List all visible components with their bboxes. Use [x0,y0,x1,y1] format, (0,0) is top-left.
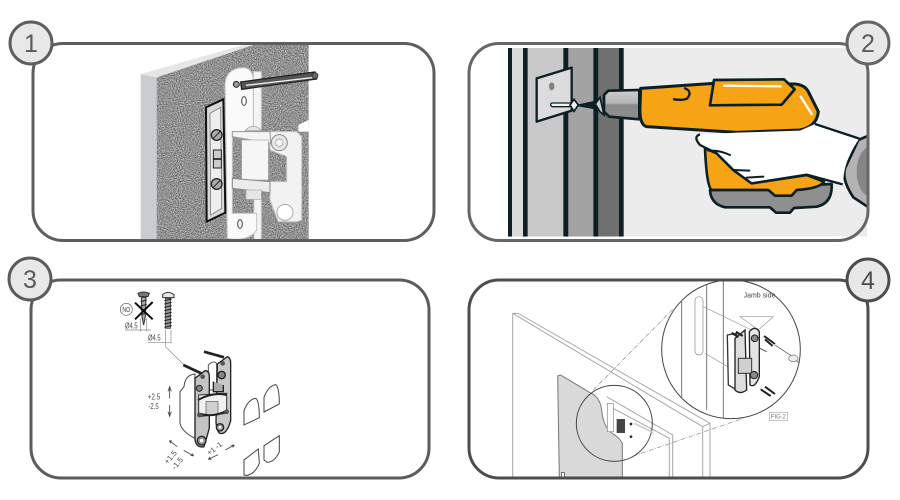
adjustment arrows and values: -2.5 [148,402,159,411]
concealed hinge [180,352,231,447]
rejected countersunk screw [120,292,153,332]
illustration: door and magnified hinge [513,280,803,478]
approved screw: Ø4.5 [148,333,161,343]
hinge leaves and body [225,68,309,240]
dash-dot guide lines [593,309,743,456]
hinge detail [727,328,775,396]
drill body [640,79,818,132]
adjustment arrows and values: +2.5 [148,393,161,402]
panel 3 border [31,280,429,478]
step badge 1: 1 [24,30,38,58]
door latch mark [561,473,564,478]
rejected countersunk screw: Ø4.5 [125,321,138,331]
step badge 3: 3 [23,266,37,294]
large detail circle [662,280,803,420]
cover caps [244,385,279,475]
gloved hand [696,124,859,184]
panel 4: door with detail circles [469,259,889,478]
drill bit [570,97,604,115]
FIG.2 tag: FIG.2 [771,415,786,421]
rejected countersunk screw: NO [122,305,131,314]
panel 4 border [469,280,868,478]
sleeve [843,135,866,208]
adjustment arrows and values: -1.5 [170,455,185,471]
step badge 2: 2 [861,30,875,58]
illustration: screws, hinge and covers [120,292,279,475]
drill chuck [604,90,639,119]
panel 2 border [469,44,868,240]
recessed slot with black frame [206,99,225,222]
small detail circle [576,385,653,461]
battery base [710,184,832,213]
screwdriver [233,72,318,89]
door top edge [141,45,257,77]
adjustment arrows and values: +1.5 [162,449,179,466]
illustration: drill on frame [508,48,885,237]
hinge plate [537,68,572,122]
step badge 2 [847,22,889,64]
panel 1 border [33,44,434,240]
Jamb side label: Jamb side [744,293,775,300]
step badge 4: 4 [861,267,875,295]
scene background [624,48,867,236]
door frame stripes [508,48,624,237]
step badge 4 [847,259,889,301]
door leaf [558,375,622,478]
adjustment arrows and values: +1 -1 [205,440,224,457]
drill handle [705,148,824,196]
step badge 3 [9,258,51,300]
panel 1: screwing the hinge onto the door [10,22,434,241]
step badge 1 [10,22,52,64]
FIG.2 tag [769,412,788,421]
door side edge [141,74,157,241]
panel 2: drilling the jamb [469,22,889,240]
door jamb outlines [513,313,710,478]
adjustment arrows and values [148,387,234,471]
approved screw [148,292,187,367]
illustration: door with hinge [141,45,318,241]
panel 3: hinge exploded diagram [9,258,429,478]
door speckled face [157,45,309,241]
